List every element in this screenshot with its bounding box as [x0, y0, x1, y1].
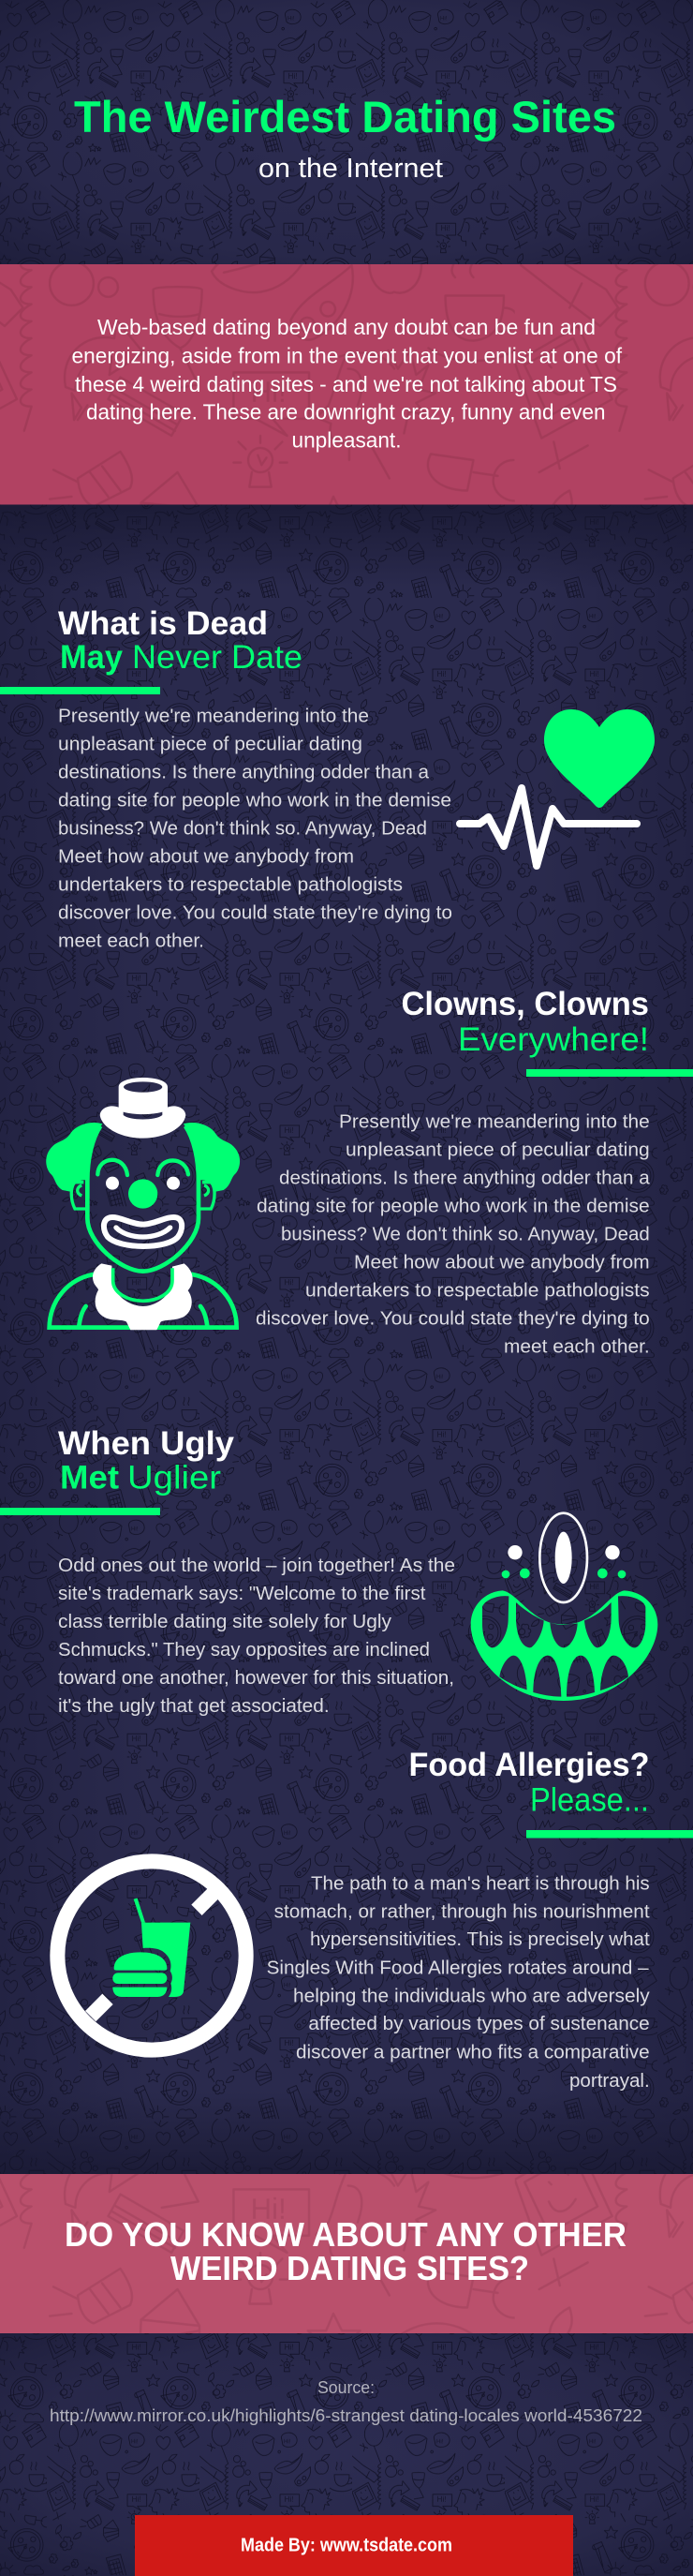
text block: section 1: business? We don't think so. Anyway, Dead: [58, 818, 427, 840]
text block: section 4: hypersensitivities. This is precisely what: [310, 1928, 650, 1950]
source text: Source:: [317, 2378, 375, 2397]
heading: When Ugly Met Uglier: When Ugly: [58, 1425, 235, 1462]
text block: section 1: Meet how about we anybody from: [58, 846, 354, 868]
icon: heart with pulse line: [460, 709, 655, 866]
text block: section 4: The path to a man's heart is through his: [311, 1873, 650, 1895]
background: header section: [0, 0, 693, 264]
heading: Food Allergies? Please...: Food Allergies?: [408, 1747, 650, 1783]
heading: When Ugly Met Uglier: [0, 1425, 235, 1515]
heading: Clowns, Clowns Everywhere!: [401, 986, 693, 1077]
source text: [50, 2378, 642, 2425]
text block: section 4: Singles With Food Allergies rotates around –: [267, 1958, 649, 1979]
text block: section 4: [267, 1873, 650, 2092]
background: main section: [0, 504, 693, 2174]
heading: Food Allergies? Please...: [408, 1747, 693, 1839]
heading: What is Dead May Never Date: [0, 605, 302, 694]
text block: section 2: undertakers to respectable pathologists: [305, 1280, 650, 1302]
intro text: Web-based dating beyond any doubt can be fun and: [97, 315, 596, 339]
text block: section 2: Meet how about we anybody from: [354, 1252, 650, 1273]
title: [74, 92, 616, 184]
call to action text: WEIRD DATING SITES?: [170, 2249, 529, 2287]
text block: section 2: discover love. You could state they're dying to: [256, 1308, 650, 1330]
footer credit box: [135, 2515, 573, 2576]
text block: section 3: Odd ones out the world – join together! As the: [58, 1555, 455, 1576]
text block: section 2: destinations. Is there anything odder than a: [279, 1168, 650, 1189]
text block: section 2: unpleasant piece of peculiar dating: [346, 1139, 650, 1161]
text block: section 3: [58, 1555, 455, 1717]
heading: What is Dead May Never Date: May: [60, 639, 124, 676]
intro text: dating here. These are downright crazy, funny and even: [86, 399, 605, 424]
heading: When Ugly Met Uglier: Met: [60, 1460, 119, 1496]
panel: intro band: [0, 264, 693, 504]
title: The Weirdest Dating Sites: [74, 92, 616, 141]
text block: section 3: it's the ugly that get associated.: [58, 1695, 330, 1717]
heading: What is Dead May Never Date: What is Dead: [58, 605, 268, 642]
heading: What is Dead May Never Date: Never Date: [132, 639, 302, 676]
panel: call to action band: [0, 2174, 693, 2333]
intro text: these 4 weird dating sites - and we're not talking about TS: [75, 372, 617, 396]
text block: section 3: toward one another, however for this situation,: [58, 1667, 454, 1689]
source text: http://www.mirror.co.uk/highlights/6-strangest dating-locales world-4536722: [50, 2406, 642, 2425]
call to action text: [65, 2215, 627, 2287]
text block: section 1: Presently we're meandering into the: [58, 706, 369, 727]
text block: section 1: undertakers to respectable pathologists: [58, 874, 403, 896]
text block: section 3: site's trademark says: "Welcome to the first: [58, 1583, 426, 1604]
heading: Food Allergies? Please...: Please...: [530, 1782, 649, 1818]
text block: section 1: dating site for people who work in the demise: [58, 790, 451, 812]
title: on the Internet: [258, 154, 443, 184]
text block: section 2: [256, 1111, 650, 1358]
icon: no food sign: [57, 1861, 246, 2050]
text block: section 3: class terrible dating site solely for Ugly: [58, 1611, 392, 1632]
text block: section 1: destinations. Is there anything odder than a: [58, 762, 430, 783]
text block: section 3: Schmucks." They say opposites are inclined: [58, 1639, 430, 1660]
call to action text: DO YOU KNOW ABOUT ANY OTHER: [65, 2215, 627, 2254]
icon: one-eyed monster: [471, 1513, 657, 1701]
text block: section 1: discover love. You could state they're dying to: [58, 902, 452, 924]
text block: section 2: dating site for people who work in the demise: [257, 1196, 650, 1217]
footer credit box: Made By: www.tsdate.com: [241, 2536, 452, 2556]
text block: section 2: business? We don't think so. Anyway, Dead: [281, 1224, 650, 1245]
background: footer section: [0, 2333, 693, 2576]
text block: section 4: discover a partner who fits a comparative: [296, 2041, 650, 2063]
text block: section 4: helping the individuals who are adversely: [293, 1985, 650, 2007]
text block: section 4: portrayal.: [569, 2070, 650, 2092]
icon: clown: [46, 1078, 240, 1330]
intro text: energizing, aside from in the event that you enlist at one of: [71, 343, 623, 367]
text block: section 1: [58, 706, 452, 952]
text block: section 4: affected by various types of sustenance: [308, 2013, 650, 2034]
heading: When Ugly Met Uglier: Uglier: [127, 1460, 221, 1496]
text block: section 1: unpleasant piece of peculiar dating: [58, 734, 362, 755]
intro text: [71, 315, 623, 452]
text block: section 4: stomach, or rather, through his nourishment: [274, 1900, 650, 1923]
heading: Clowns, Clowns Everywhere!: Everywhere!: [458, 1021, 649, 1058]
heading: Clowns, Clowns Everywhere!: Clowns, Clowns: [401, 986, 649, 1022]
intro text: unpleasant.: [292, 427, 401, 452]
text block: section 2: Presently we're meandering into the: [339, 1111, 650, 1133]
text block: section 1: meet each other.: [58, 931, 204, 952]
text block: section 2: meet each other.: [504, 1336, 650, 1358]
